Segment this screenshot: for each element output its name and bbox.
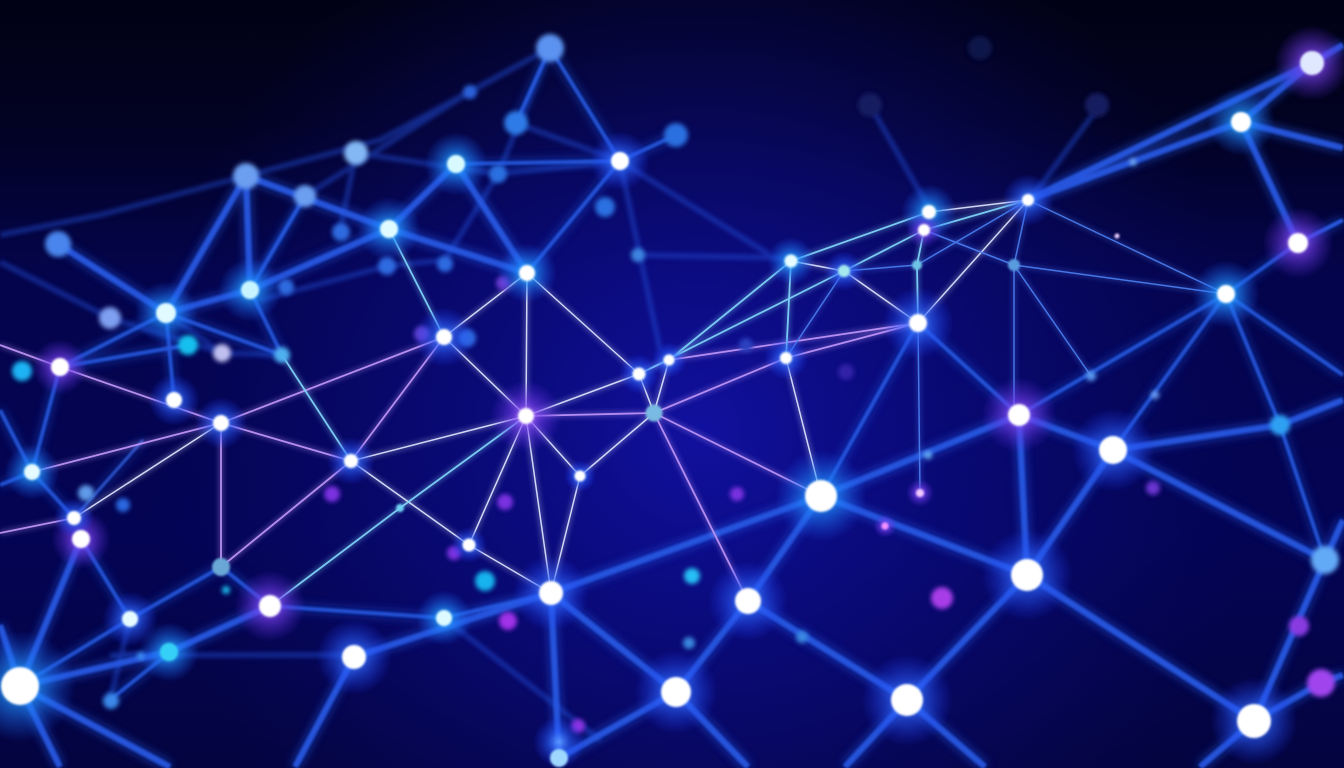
thin edges: bright central mesh [0,200,1226,606]
back edges: blurred distant network [0,48,1100,740]
